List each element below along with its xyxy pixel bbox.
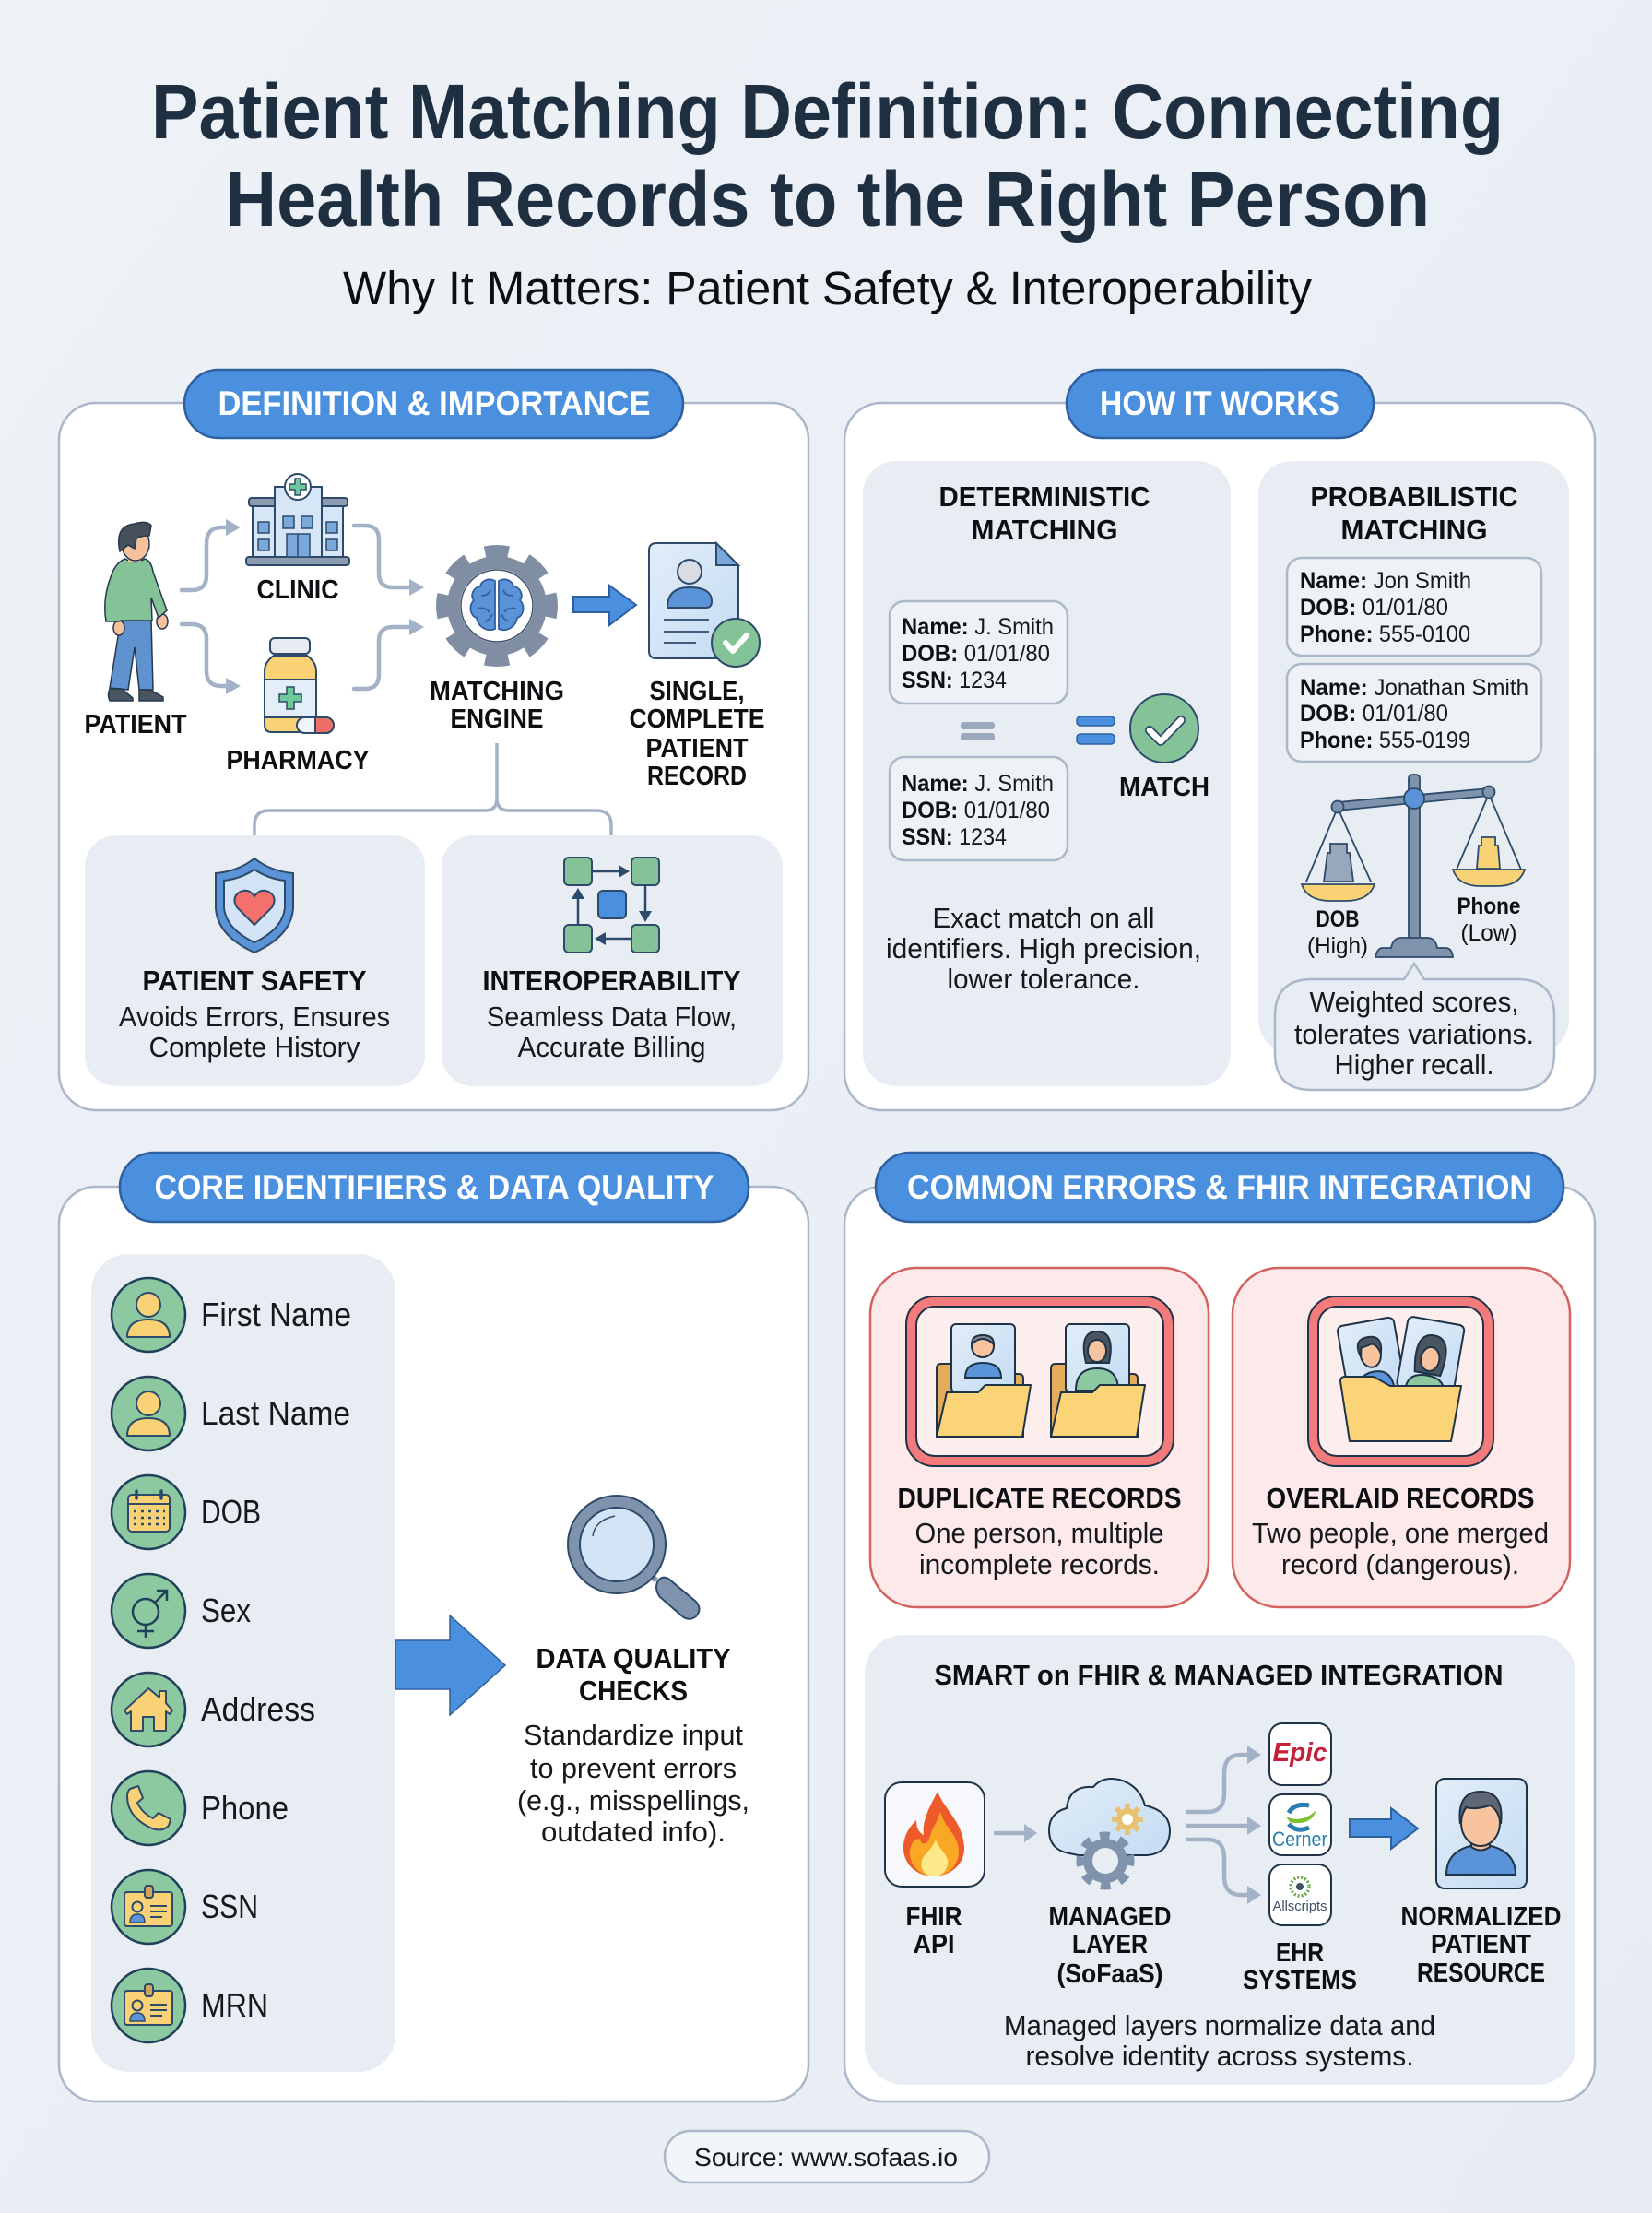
label: matching engine: MATCHING [430, 677, 564, 706]
record card: second deterministic record: DOB: 01/01/80 [902, 798, 1050, 823]
section heading pill: definition and importance [184, 370, 683, 438]
icon: patient figure [105, 522, 168, 701]
item: last name [112, 1377, 350, 1450]
item: date of birth: DOB [201, 1493, 261, 1531]
column: deterministic matching [863, 461, 1231, 1086]
heading: interoperability: INTEROPERABILITY [483, 964, 741, 997]
record card: first deterministic record [890, 601, 1068, 704]
text: duplicate records body [914, 1517, 1163, 1580]
heading: probabilistic matching: PROBABILISTIC [1311, 480, 1517, 513]
column: probabilistic matching [1258, 461, 1569, 1090]
panel: core identifiers and data quality [59, 1153, 808, 2101]
icon: cerner logo [1269, 1794, 1331, 1855]
label: normalized patient resource: PATIENT [1431, 1930, 1531, 1959]
record card: first probabilistic record: Name: Jon Smith [1300, 568, 1471, 594]
section heading pill: definition and importance: DEFINITION & IMPORTANCE [218, 385, 651, 422]
card: patient safety [85, 835, 425, 1086]
text: managed layers description: resolve identity across systems. [1025, 2040, 1414, 2072]
record card: second probabilistic record: Phone: 555-0199 [1300, 728, 1470, 753]
icon: patient record document with check [649, 543, 760, 667]
section heading pill: core identifiers: CORE IDENTIFIERS & DATA QUALITY [155, 1168, 714, 1206]
arrow: ehr to normalized resource [1350, 1808, 1418, 1849]
item: ssn [112, 1870, 258, 1944]
source pill: Source: www.sofaas.io [694, 2143, 958, 2172]
icon: clinic [246, 474, 349, 565]
callout: weighted scores: tolerates variations. [1294, 1018, 1534, 1050]
heading: deterministic matching: MATCHING [972, 514, 1117, 546]
label: normalized patient resource: RESOURCE [1417, 1959, 1545, 1988]
panel: common errors and fhir integration [844, 1153, 1595, 2101]
label: single complete patient record: COMPLETE [629, 704, 765, 734]
text: deterministic description: lower tolerance. [948, 963, 1139, 995]
label: fhir api: API [913, 1930, 955, 1959]
icon: two separate folders in warning frame [906, 1296, 1174, 1466]
flow arrows into matching engine [182, 519, 424, 694]
icon: equals sign grey [961, 722, 995, 740]
section heading pill: common errors [876, 1153, 1564, 1222]
item: first name: First Name [201, 1296, 351, 1333]
heading: patient safety: PATIENT SAFETY [142, 964, 367, 997]
connector: engine to outcomes [254, 743, 611, 835]
icon: match check [1130, 694, 1198, 763]
label: phone low: (Low) [1460, 920, 1517, 946]
label: managed layer sofaas: MANAGED [1049, 1902, 1171, 1932]
label: ehr systems: SYSTEMS [1243, 1966, 1357, 1995]
text: duplicate records body: One person, multiple [914, 1517, 1163, 1549]
heading: probabilistic matching [1311, 480, 1517, 546]
item: ssn: SSN [201, 1888, 258, 1925]
record card: first probabilistic record: Phone: 555-0100 [1300, 621, 1470, 647]
arrow: fhir to managed layer [994, 1824, 1037, 1842]
heading: data quality checks: DATA QUALITY [537, 1642, 731, 1675]
section heading pill: how it works [1067, 370, 1374, 438]
text: duplicate records body: incomplete records. [919, 1548, 1160, 1580]
text: deterministic description: identifiers. High precision, [886, 932, 1201, 964]
heading: overlaid records: OVERLAID RECORDS [1267, 1482, 1534, 1514]
text: overlaid records body [1252, 1517, 1549, 1580]
section heading pill: core identifiers [120, 1153, 749, 1222]
callout: weighted scores [1275, 964, 1554, 1090]
icon: allscripts logo: Allscripts [1272, 1899, 1328, 1914]
icon: normalized patient [1436, 1779, 1527, 1888]
arrow: engine to record [573, 586, 636, 625]
text: data quality description: (e.g., misspellings, [517, 1784, 749, 1817]
label: single complete patient record [629, 677, 765, 791]
heading: duplicate records: DUPLICATE RECORDS [898, 1482, 1182, 1514]
text: interoperability body: Accurate Billing [518, 1031, 706, 1063]
icon: equals sign blue [1077, 716, 1115, 744]
icon: merged folder in warning frame [1308, 1296, 1493, 1466]
text: deterministic description: Exact match on all [933, 902, 1154, 934]
text: patient safety body: Avoids Errors, Ensures [119, 1000, 390, 1033]
item: sex [112, 1574, 251, 1648]
icon: magnifying glass [568, 1496, 699, 1619]
label: fhir api: FHIR [905, 1902, 962, 1932]
callout: weighted scores: Higher recall. [1335, 1048, 1493, 1081]
label: managed layer sofaas: (SoFaaS) [1056, 1959, 1163, 1989]
heading: probabilistic matching: MATCHING [1340, 514, 1488, 546]
text: data quality description: to prevent errors [530, 1752, 737, 1784]
text: managed layers description [1004, 2009, 1435, 2072]
list: core identifiers [91, 1254, 395, 2072]
record card: first probabilistic record [1287, 558, 1541, 656]
icon: shield with heart [216, 858, 293, 953]
text: data quality description [517, 1719, 749, 1848]
item: date of birth [112, 1475, 261, 1549]
label: dob high [1307, 906, 1368, 959]
icon: cloud with gears [1049, 1779, 1170, 1884]
icon: pharmacy bottle [265, 638, 334, 733]
record card: first probabilistic record: DOB: 01/01/80 [1300, 595, 1448, 621]
item: mrn: MRN [201, 1986, 268, 2024]
record card: second probabilistic record: DOB: 01/01/80 [1300, 701, 1448, 727]
label: pharmacy: PHARMACY [227, 746, 369, 775]
heading: smart on fhir: SMART on FHIR & MANAGED INTEGRATION [935, 1659, 1503, 1691]
label: clinic: CLINIC [256, 575, 339, 605]
record card: second deterministic record [890, 757, 1068, 860]
text: data quality description: Standardize input [524, 1719, 743, 1751]
text: overlaid records body: record (dangerous). [1281, 1548, 1519, 1580]
item: sex: Sex [201, 1592, 251, 1629]
title: Patient Matching Definition: Connecting [151, 68, 1504, 155]
title [151, 68, 1504, 243]
icon: epic logo [1269, 1723, 1331, 1785]
icon: interoperability loop [564, 858, 659, 953]
panel: definition and importance [59, 370, 808, 1110]
item: address [112, 1673, 315, 1746]
record card: first deterministic record: DOB: 01/01/80 [902, 641, 1050, 667]
item: phone [112, 1771, 289, 1845]
item: last name: Last Name [201, 1394, 350, 1432]
text: interoperability body [487, 1000, 737, 1063]
card: overlaid records [1233, 1268, 1570, 1607]
label: matching engine [430, 677, 564, 734]
label: single complete patient record: SINGLE, [649, 677, 745, 706]
icon: allscripts logo [1269, 1864, 1331, 1925]
text: managed layers description: Managed layers normalize data and [1004, 2009, 1435, 2041]
text: deterministic description [886, 902, 1201, 995]
card: duplicate records [870, 1268, 1209, 1607]
label: fhir api [905, 1902, 962, 1959]
text: overlaid records body: Two people, one merged [1252, 1517, 1549, 1549]
label: single complete patient record: PATIENT [645, 734, 749, 763]
record card: second probabilistic record [1287, 664, 1541, 762]
label: single complete patient record: RECORD [647, 762, 747, 791]
record card: second probabilistic record: Name: Jonathan Smith [1300, 675, 1528, 701]
card: smart on fhir and managed integration [865, 1635, 1575, 2085]
label: matching engine: ENGINE [450, 704, 544, 734]
heading: data quality checks [537, 1642, 731, 1707]
item: address: Address [201, 1690, 315, 1728]
item: mrn [112, 1969, 268, 2042]
label: dob high: DOB [1316, 906, 1359, 932]
icon: weighing scale [1302, 775, 1525, 957]
panel: how it works [844, 370, 1595, 1110]
heading: deterministic matching [938, 480, 1150, 546]
label: ehr systems [1243, 1938, 1357, 1995]
label: managed layer sofaas [1049, 1902, 1171, 1989]
label: normalized patient resource [1401, 1902, 1562, 1988]
item: phone: Phone [201, 1789, 289, 1827]
icon: matching engine gear with brain [444, 553, 549, 658]
record card: first deterministic record: SSN: 1234 [902, 668, 1007, 693]
label: phone low [1457, 893, 1521, 946]
icon: epic logo: Epic [1272, 1738, 1328, 1768]
label: normalized patient resource: NORMALIZED [1401, 1902, 1562, 1932]
card: interoperability [442, 835, 783, 1086]
title: Health Records to the Right Person [225, 156, 1430, 243]
subtitle: Why It Matters: Patient Safety & Interoperability [343, 262, 1312, 314]
text: interoperability body: Seamless Data Flow, [487, 1000, 737, 1033]
arrows: managed layer to ehr systems [1186, 1746, 1261, 1904]
section heading pill: how it works: HOW IT WORKS [1100, 385, 1339, 422]
label: managed layer sofaas: LAYER [1072, 1930, 1148, 1959]
label: phone low: Phone [1457, 893, 1521, 919]
label: dob high: (High) [1307, 933, 1368, 959]
icon: cerner logo: Cerner [1272, 1828, 1328, 1851]
text: patient safety body [119, 1000, 390, 1063]
text: patient safety body: Complete History [149, 1031, 360, 1063]
record card: first deterministic record: Name: J. Smith [902, 614, 1054, 640]
label: match: MATCH [1119, 773, 1210, 802]
icon: fhir flame [885, 1782, 985, 1887]
label: ehr systems: EHR [1276, 1938, 1324, 1968]
record card: second deterministic record: Name: J. Smith [902, 771, 1054, 797]
heading: deterministic matching: DETERMINISTIC [938, 480, 1150, 513]
heading: data quality checks: CHECKS [579, 1675, 688, 1707]
text: data quality description: outdated info). [541, 1816, 726, 1848]
arrow: identifiers to data quality [395, 1615, 505, 1715]
label: patient: PATIENT [85, 710, 187, 740]
item: first name [112, 1278, 351, 1352]
record card: second deterministic record: SSN: 1234 [902, 824, 1007, 850]
callout: weighted scores: Weighted scores, [1309, 986, 1519, 1018]
section heading pill: common errors: COMMON ERRORS & FHIR INTEGRATION [907, 1168, 1532, 1206]
source pill [665, 2131, 989, 2183]
